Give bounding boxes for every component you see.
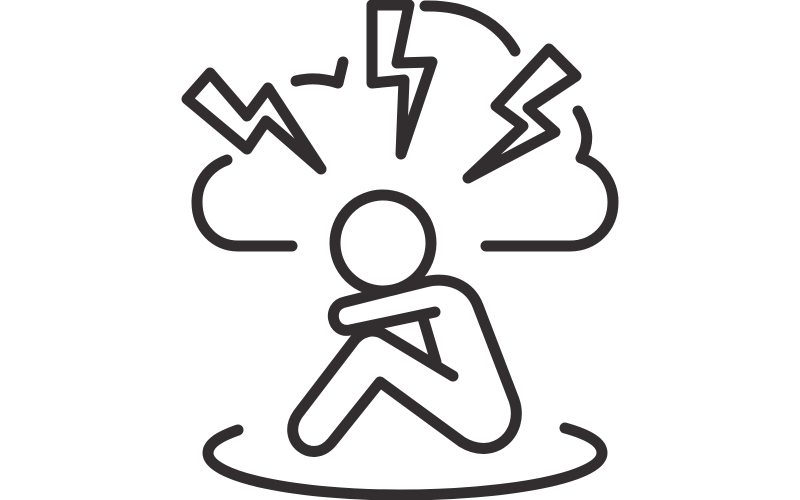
arc: broken dash between left and middle bolts [296, 62, 343, 83]
icon: middle lightning bolt [372, 5, 432, 154]
icon: right lightning bolt [468, 49, 576, 178]
icon: left lightning bolt [187, 73, 321, 169]
icon: storm cloud left part [197, 160, 292, 246]
icon: head [335, 195, 431, 291]
icon: storm cloud right part [486, 111, 613, 246]
arc: curve between middle and right bolts [425, 6, 515, 51]
icon: seated body with folded arm and legs [293, 280, 516, 451]
ground ring [208, 428, 602, 495]
forearm support [423, 318, 436, 362]
folded arm, back and legs [293, 280, 516, 451]
